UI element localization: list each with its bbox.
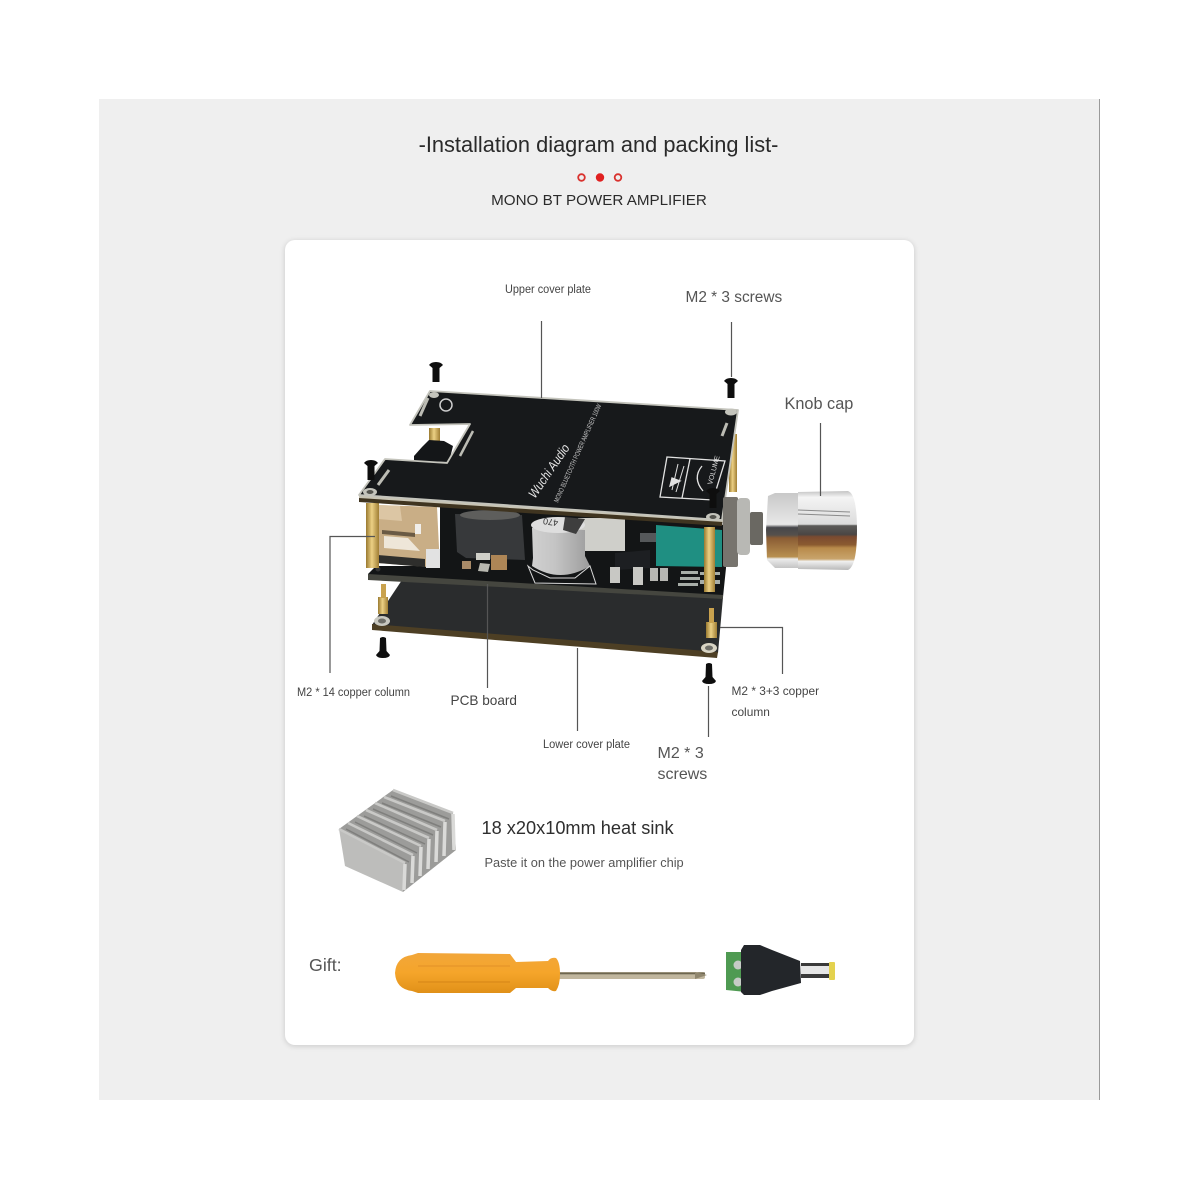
label: knob cap: Knob cap bbox=[784, 395, 853, 413]
amplifier assembly illustration bbox=[359, 362, 857, 684]
label: copper column right: M2 * 3+3 copper bbox=[732, 684, 819, 698]
electrolytic capacitor bbox=[528, 516, 596, 584]
printed circle logo bbox=[440, 399, 452, 411]
usb connector bbox=[378, 505, 440, 568]
label: upper cover plate: Upper cover plate bbox=[505, 284, 591, 296]
label: copper column left: M2 * 14 copper column bbox=[297, 687, 410, 699]
subtitle: MONO BT POWER AMPLIFIER bbox=[491, 192, 707, 209]
title: -Installation diagram and packing list- bbox=[419, 132, 778, 157]
panel: white diagram card bbox=[285, 240, 914, 1045]
label: bottom screws bbox=[658, 745, 707, 783]
label: copper column right: column bbox=[732, 705, 770, 719]
upper copper columns bbox=[366, 428, 737, 592]
heat sink title: 18 x20x10mm heat sink bbox=[482, 818, 674, 838]
gift label: Gift: bbox=[309, 955, 342, 975]
heat sink note: Paste it on the power amplifier chip bbox=[484, 855, 684, 870]
knob nut bbox=[723, 497, 763, 567]
label: bottom screws: screws bbox=[658, 766, 707, 783]
electrolytic capacitor: 470 bbox=[542, 516, 559, 528]
label: bottom screws: M2 * 3 bbox=[658, 745, 704, 762]
printed volume label: VOLUME bbox=[707, 455, 722, 486]
silver block bbox=[578, 518, 625, 551]
printed silk labels bbox=[378, 398, 727, 485]
label: top screws: M2 * 3 screws bbox=[686, 289, 782, 306]
pcb board bbox=[368, 505, 726, 599]
lower copper columns bbox=[378, 584, 717, 638]
black block in notch bbox=[414, 440, 453, 462]
inductor bbox=[455, 510, 525, 560]
label: copper column right bbox=[732, 684, 819, 719]
upper cover plate bbox=[359, 391, 738, 526]
lower cover plate bbox=[372, 580, 723, 658]
printed board name: MONO BLUETOOTH POWER AMPLIFIER 100W bbox=[553, 403, 603, 504]
leader lines bbox=[330, 321, 820, 737]
printed control box bbox=[660, 457, 725, 500]
teal potentiometer bbox=[656, 525, 722, 567]
label: pcb board: PCB board bbox=[450, 693, 517, 708]
icon: heat sink bbox=[339, 790, 456, 892]
background panel bbox=[99, 99, 1100, 1100]
decorative red dots bbox=[578, 173, 621, 182]
knob cap bbox=[766, 491, 857, 570]
screws bbox=[364, 362, 738, 684]
icon: dc power jack connector bbox=[726, 945, 835, 995]
printed logo: Wuchi Audio bbox=[525, 441, 573, 501]
small components bbox=[462, 533, 668, 585]
label: lower cover plate: Lower cover plate bbox=[543, 739, 630, 751]
solder details bbox=[678, 571, 720, 586]
icon: screwdriver bbox=[395, 953, 707, 993]
